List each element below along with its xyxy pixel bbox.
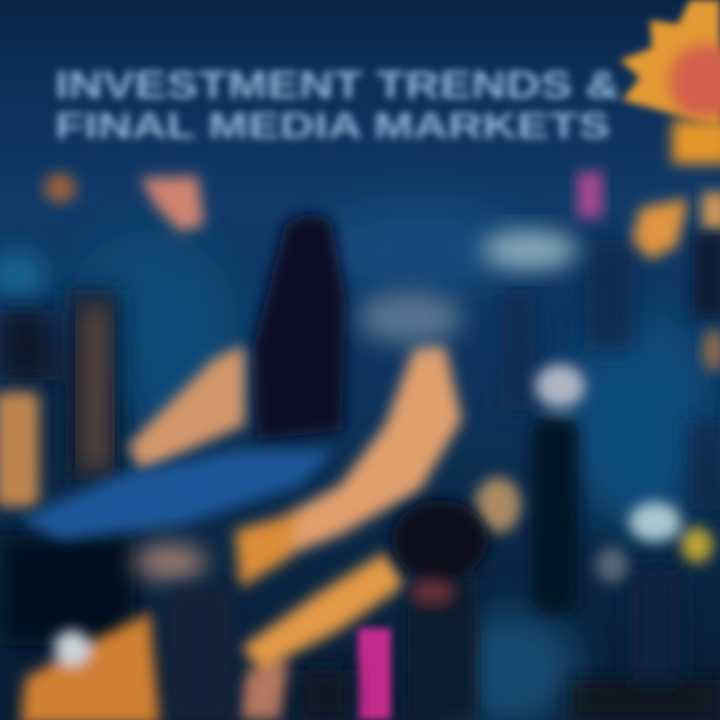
left orange blocks [0,305,106,507]
lower left orange panel [20,612,160,720]
left figure tags [0,173,204,301]
sun icon [620,0,720,164]
title [55,64,620,146]
lower dark figures [300,670,350,720]
lower left phone [167,588,233,720]
right lower accents [475,477,713,583]
right figure highlights [482,172,720,372]
pink bar [358,628,391,720]
dark central figure [252,214,346,440]
blue table band [20,450,335,540]
left dark figures [0,290,135,645]
grey haze behind hand [134,292,462,580]
right figure dark masses [500,240,720,680]
left arm [128,345,245,472]
title: FINAL MEDIA MARKETS [55,105,610,146]
large central arm [235,345,462,588]
lower central dark figure [392,500,488,720]
lower central arm [240,552,405,720]
right dark columns [532,232,720,613]
title: INVESTMENT TRENDS & [55,64,620,107]
